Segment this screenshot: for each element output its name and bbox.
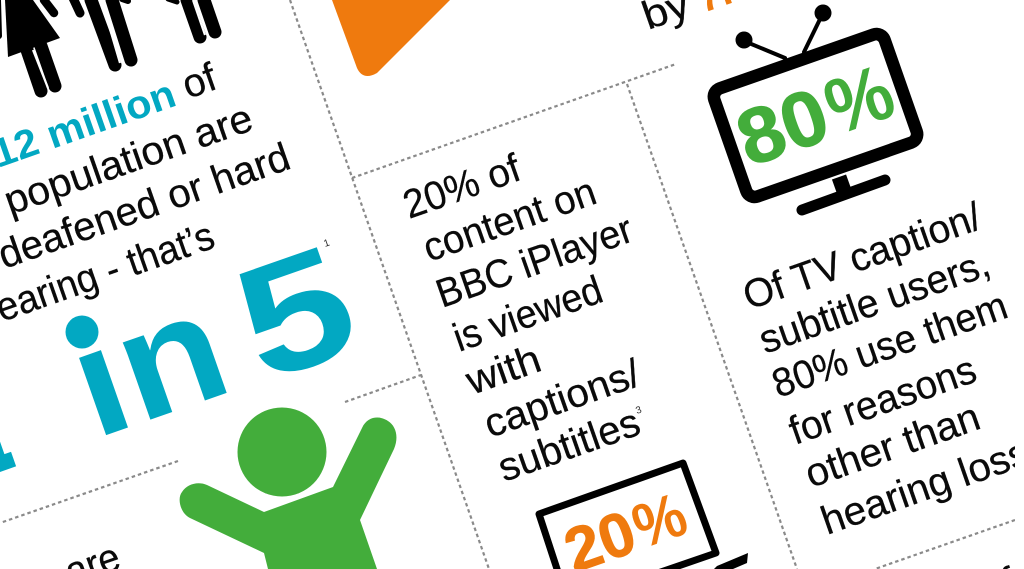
big number: 1 in 5: in [49,257,247,470]
text block: TV caption statistic [737,194,1024,569]
text block: iPlayer statistic: content on [417,169,602,270]
text: 12 million of: of [176,55,223,107]
text block: iPlayer statistic: subtitles [492,400,646,490]
big number: 1 in 5 [0,210,377,517]
text: by and orange figure [636,0,758,38]
text block: TV caption statistic: subtitle users, [753,241,995,362]
icon: orange triangle [332,0,450,76]
icon: people pictograms [0,0,215,91]
text block: iPlayer statistic: BBC iPlayer [430,207,638,316]
icon: television with 80%: % [814,47,905,152]
text: deafened or hard: deafened or hard [0,135,296,277]
text block: iPlayer statistic: is viewed [447,268,608,360]
text block: TV caption statistic: for reasons [783,348,982,453]
icon: television with 80% [703,4,928,210]
text: population are: population are [0,96,258,223]
text block: iPlayer statistic: 20% of [397,146,527,227]
icon: green person [180,408,396,569]
big number: 1 in 5: 5 [214,210,377,415]
text block: TV caption statistic: 80% use them [766,284,1013,406]
icon: laptop with 20% [539,463,748,569]
text block: iPlayer statistic: captions/ [478,351,647,446]
icon: television with 80%: 80 [726,70,840,183]
text: 12 million of [0,55,223,176]
footnote 1: 1 [322,237,332,250]
text block: TV caption statistic: Of TV caption/ [737,194,988,318]
icon: laptop with 20%: % [624,480,696,562]
text block: iPlayer statistic [397,146,647,490]
text block: iPlayer statistic: with [459,337,547,404]
text block: iPlayer statistic: 3 [634,404,644,417]
text block: TV caption statistic: other than [799,395,986,496]
